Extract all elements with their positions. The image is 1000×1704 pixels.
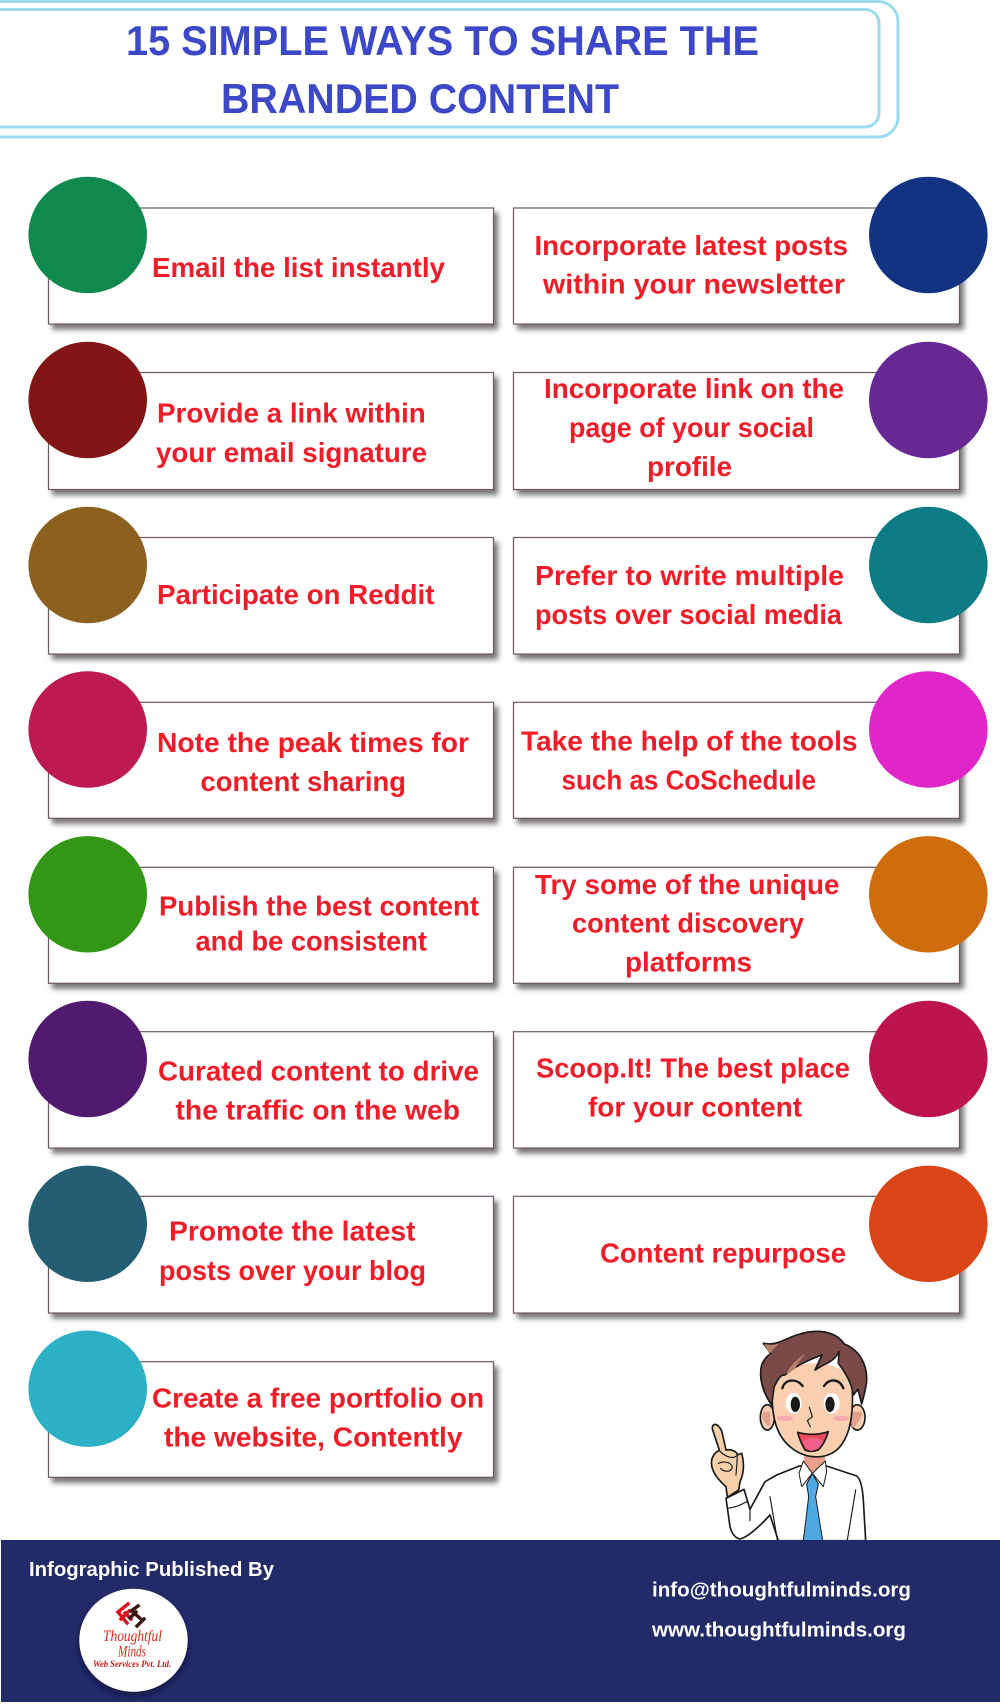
logo badge: Thoughtful [103,1628,162,1645]
panel: free portfolio: Create a free portfolio on [152,1383,484,1414]
panel: email signature: your email signature [156,437,427,468]
panel: email signature [28,342,494,490]
panel: peak times: Note the peak times for [157,727,469,758]
panel: scoop.it [514,1001,988,1148]
panel: social profile link [514,342,988,490]
logo badge: Web Services Pvt. Ltd. [93,1660,171,1670]
panel: promote posts: posts over your blog [159,1255,426,1286]
panel: discovery platforms: Try some of the unique [535,869,840,900]
panel: tools: such as CoSchedule [562,765,816,796]
panel: curated content: Curated content to drive [158,1056,479,1087]
footer band [1,1540,1000,1702]
panel: best content: and be consistent [196,926,427,957]
panel: promote posts: Promote the latest [169,1215,416,1246]
contact email: info@thoughtfulminds.org [652,1580,911,1602]
title banner [0,2,898,137]
panel: scoop.it: for your content [588,1092,802,1123]
title text: 15 SIMPLE WAYS TO SHARE THE [126,17,759,64]
panel: peak times [28,671,494,818]
panel: email signature: Provide a link within [157,398,426,429]
contact website: www.thoughtfulminds.org [651,1620,906,1642]
panel: tools: Take the help of the tools [521,726,858,757]
panel: incorporate latest posts: within your newsletter [542,268,845,299]
panel: incorporate latest posts: Incorporate latest posts [534,230,848,261]
panel: free portfolio: the website, Contently [164,1422,463,1453]
panel: social profile link: Incorporate link on the [544,373,844,404]
panel: promote posts [28,1166,494,1313]
panel: social profile link: profile [647,451,732,482]
panel: discovery platforms [514,836,988,983]
panel: multiple posts [514,507,988,654]
panel: multiple posts: Prefer to write multiple [535,560,844,591]
panel: peak times: content sharing [200,766,406,797]
title text: BRANDED CONTENT [221,75,619,122]
panel: reddit: Participate on Reddit [157,579,434,610]
panel: incorporate latest posts [514,177,988,324]
title text [126,17,759,122]
panel: tools [514,671,988,818]
panel: curated content: the traffic on the web [176,1095,460,1126]
logo badge [79,1589,188,1692]
panel: free portfolio [28,1330,494,1477]
logo badge: Minds [117,1644,146,1661]
panel: discovery platforms: platforms [625,947,752,978]
panel: email the list [28,177,494,324]
panel: social profile link: page of your social [569,412,814,443]
panel: multiple posts: posts over social media [535,599,842,630]
panel: discovery platforms: content discovery [572,908,804,939]
panel: best content [28,836,494,983]
panel: scoop.it: Scoop.It! The best place [536,1053,850,1084]
panel: curated content [28,1001,494,1148]
panel: content repurpose [514,1166,988,1313]
panel: best content: Publish the best content [159,891,479,922]
panel: email the list: Email the list instantly [152,252,445,283]
panel: reddit [28,507,494,654]
icon: pointing cartoon businessman [711,1331,867,1541]
panel: content repurpose: Content repurpose [600,1238,846,1269]
footer heading: Infographic Published By [29,1559,275,1581]
logo mark [118,1604,144,1626]
